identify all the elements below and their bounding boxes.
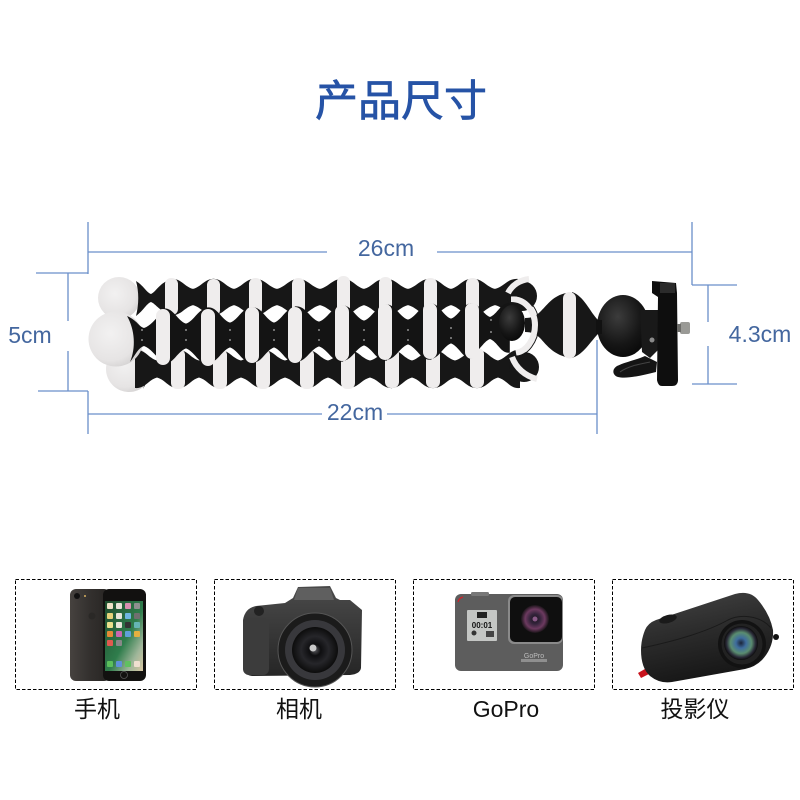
dimension: 4.3cm plate xyxy=(692,285,791,384)
dimension: 4.3cm plate: 4.3cm xyxy=(729,321,791,347)
panel: GoPro xyxy=(414,580,594,722)
icon: GoPro: GoPro xyxy=(524,653,544,660)
dimension: 5cm height: 5cm xyxy=(8,322,52,348)
label: phone: 手机 xyxy=(74,696,120,722)
tripod leg: bottom xyxy=(106,346,539,392)
tripod leg: top xyxy=(98,276,537,319)
dimension: 22cm folded length: 22cm xyxy=(327,399,383,425)
title: 产品尺寸 xyxy=(315,78,487,126)
icon: projector xyxy=(638,593,779,682)
panel: projector xyxy=(612,580,794,722)
panel: phone xyxy=(16,580,196,722)
icon: phone xyxy=(70,589,146,681)
tripod illustration xyxy=(88,276,690,392)
label: camera: 相机 xyxy=(276,696,322,722)
tripod camera mounting plate xyxy=(613,281,690,386)
panel: camera xyxy=(214,580,396,722)
icon: GoPro xyxy=(455,592,563,671)
dimension: 5cm height xyxy=(8,273,88,391)
dimension: 22cm folded length xyxy=(88,340,597,434)
icon: GoPro: 00:01 xyxy=(472,621,493,630)
dimension: 26cm overall length xyxy=(88,222,692,285)
label: projector: 投影仪 xyxy=(660,696,730,722)
label: GoPro: GoPro xyxy=(473,696,539,722)
tripod leg: middle front xyxy=(88,303,510,366)
icon: camera xyxy=(243,586,362,687)
tripod neck and ball joint xyxy=(499,292,649,358)
dimension: 26cm overall length: 26cm xyxy=(358,235,414,261)
